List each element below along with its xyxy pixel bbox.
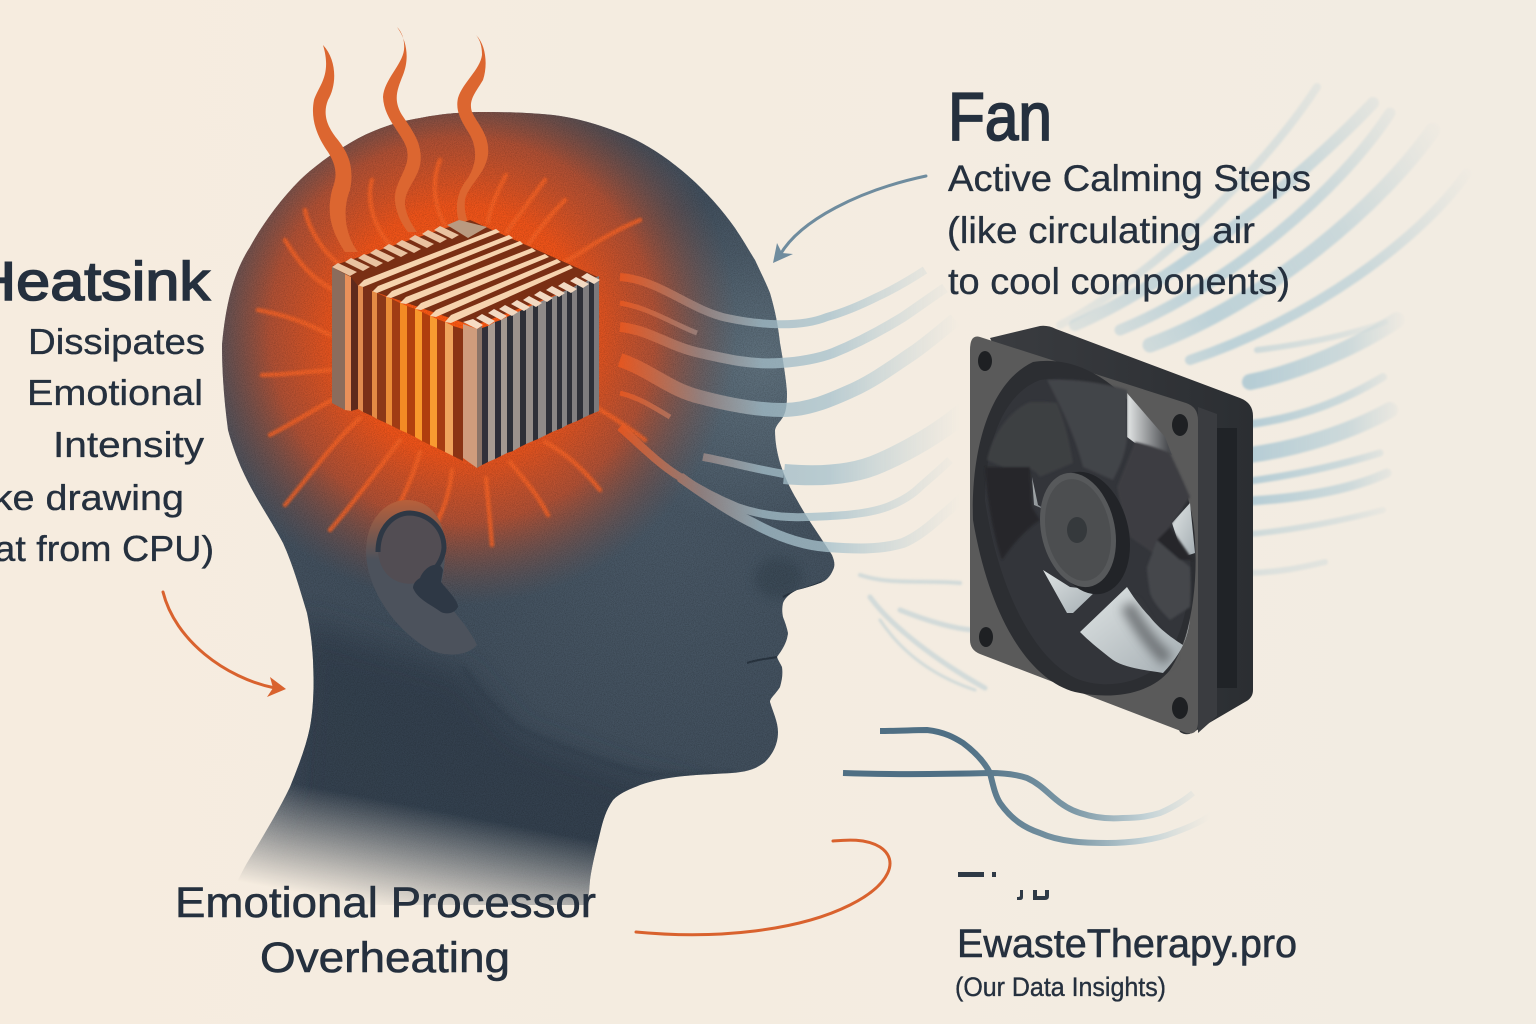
flow bands across face bbox=[620, 270, 990, 548]
light gaps between blades bbox=[1127, 393, 1172, 455]
clipped text fragments bbox=[958, 872, 1049, 900]
fan front face bbox=[970, 337, 1198, 734]
heatsink label bbox=[0, 250, 214, 569]
right face fin caps bbox=[476, 273, 600, 325]
fan label: (like circulating air bbox=[947, 210, 1255, 251]
heatsink label: Emotional bbox=[27, 372, 203, 413]
grain on head bbox=[215, 105, 840, 905]
heatsink label: Dissipates bbox=[28, 321, 205, 362]
processor label bbox=[175, 879, 596, 982]
source label: (Our Data Insights) bbox=[955, 972, 1166, 1002]
back row fin caps bbox=[332, 220, 487, 276]
heat radiating lines bbox=[258, 160, 645, 545]
processor label: Overheating bbox=[260, 934, 510, 982]
faint lower streaks near mouth bbox=[860, 575, 985, 690]
head silhouette bbox=[222, 112, 834, 905]
left face fins bbox=[332, 267, 345, 410]
airflow streaks behind fan bbox=[1060, 87, 1467, 573]
ear bbox=[366, 500, 477, 655]
right face fins bbox=[482, 326, 488, 465]
fan bbox=[970, 326, 1253, 734]
upper head tone bbox=[344, 112, 661, 155]
wavy blue lines under fan bbox=[843, 730, 1213, 843]
neck shadow bbox=[274, 616, 677, 896]
heatsink label: Intensity bbox=[53, 424, 204, 465]
mounting holes bbox=[978, 351, 1188, 719]
source label bbox=[955, 922, 1297, 1002]
fan hub bbox=[1046, 461, 1130, 605]
fan housing back bbox=[990, 326, 1253, 734]
heatsink block bbox=[332, 220, 600, 468]
fan label bbox=[947, 79, 1311, 302]
long fin tops bbox=[358, 229, 573, 323]
fan label: Fan bbox=[948, 79, 1052, 155]
source label: EwasteTherapy.pro bbox=[957, 922, 1297, 966]
arrow: fan to head bbox=[773, 176, 926, 263]
fan opening bbox=[973, 361, 1196, 696]
orange curve to processor label bbox=[636, 840, 890, 935]
jaw line bbox=[680, 773, 730, 776]
heat waves rising from head bbox=[313, 27, 488, 252]
front corner fin bbox=[463, 324, 477, 468]
processor label: Emotional Processor bbox=[175, 879, 596, 927]
fan label: Active Calming Steps bbox=[948, 158, 1311, 199]
fan blades bbox=[985, 380, 1193, 620]
nose shadow bbox=[758, 562, 798, 596]
arrow: heatsink to head bbox=[163, 592, 286, 697]
fan label: to cool components) bbox=[948, 261, 1290, 302]
nostril and lip lines bbox=[747, 582, 822, 663]
